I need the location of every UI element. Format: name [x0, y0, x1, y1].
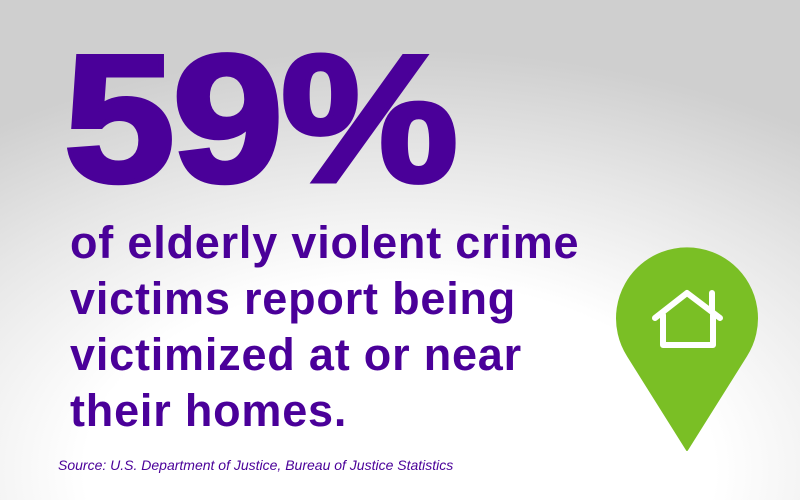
source: Source: U.S. Department of Justice, Bureau of Justice Statistics	[58, 457, 453, 473]
headline number: 59%	[64, 18, 456, 220]
description text: of elderly violent crime	[70, 217, 579, 268]
description text: their homes.	[70, 385, 347, 436]
description text	[70, 217, 579, 436]
description text: victims report being	[70, 273, 516, 324]
description text: victimized at or near	[70, 329, 522, 380]
